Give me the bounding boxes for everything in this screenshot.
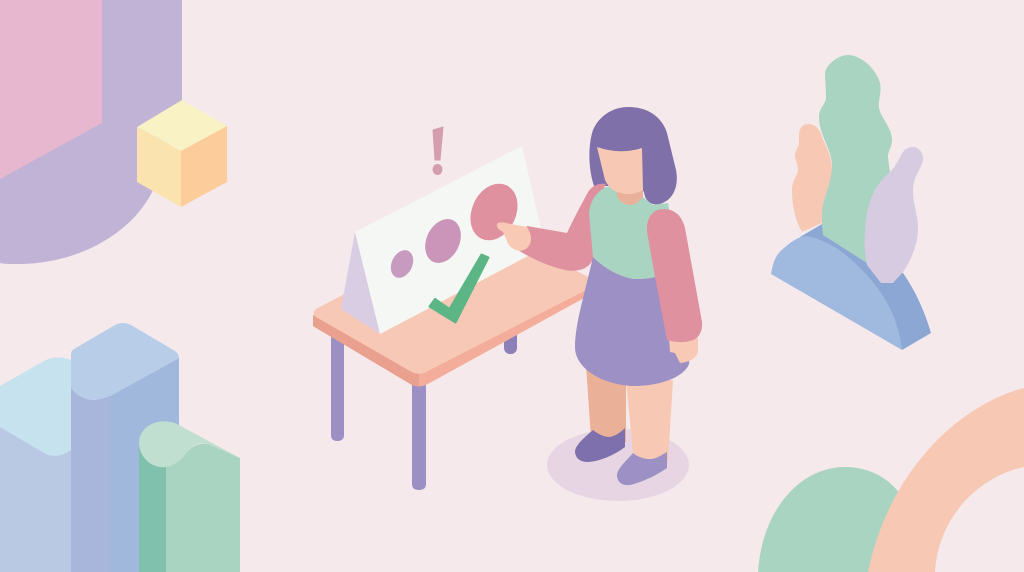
table left leg — [331, 330, 344, 441]
peach leaf — [792, 124, 832, 232]
tall blue column — [71, 323, 179, 572]
blue base front — [771, 236, 902, 350]
icon: green check mark — [430, 254, 488, 322]
table front leg — [412, 380, 426, 490]
hair — [589, 107, 677, 204]
sign card — [341, 146, 545, 334]
medium circle — [418, 213, 468, 269]
green column — [139, 421, 240, 572]
floor shadow — [547, 429, 689, 501]
top-left shapes — [0, 0, 182, 264]
skirt — [575, 257, 689, 386]
back leg — [586, 365, 626, 442]
back shoe — [575, 428, 625, 462]
blue base back — [800, 224, 931, 350]
bottom-left columns — [0, 323, 240, 572]
bottom-right shapes — [758, 388, 1024, 572]
table back leg — [504, 330, 517, 354]
front shoe — [617, 452, 667, 485]
pointing hand — [497, 222, 531, 251]
table — [313, 222, 600, 490]
icon: yellow cube — [137, 100, 227, 207]
green dome — [758, 467, 901, 572]
hanging hand — [669, 338, 698, 363]
small circle — [387, 247, 417, 281]
large circle — [462, 176, 526, 248]
person — [497, 107, 702, 501]
green top — [589, 187, 680, 279]
lilac leaf — [865, 147, 923, 283]
hanging arm — [647, 209, 702, 342]
pointing arm — [518, 184, 606, 271]
neck — [617, 188, 643, 205]
sign front — [355, 146, 545, 334]
sign side — [341, 232, 380, 334]
light blue column — [0, 357, 71, 572]
green leaf — [819, 55, 892, 263]
pink panel — [0, 0, 102, 179]
face — [597, 147, 643, 194]
peach arc — [868, 388, 1024, 572]
table top — [314, 222, 600, 374]
table edge — [313, 280, 595, 386]
plant sculpture — [771, 55, 931, 350]
icon: exclamation mark — [432, 127, 443, 175]
lavender arch — [0, 0, 182, 264]
front leg — [626, 380, 673, 464]
